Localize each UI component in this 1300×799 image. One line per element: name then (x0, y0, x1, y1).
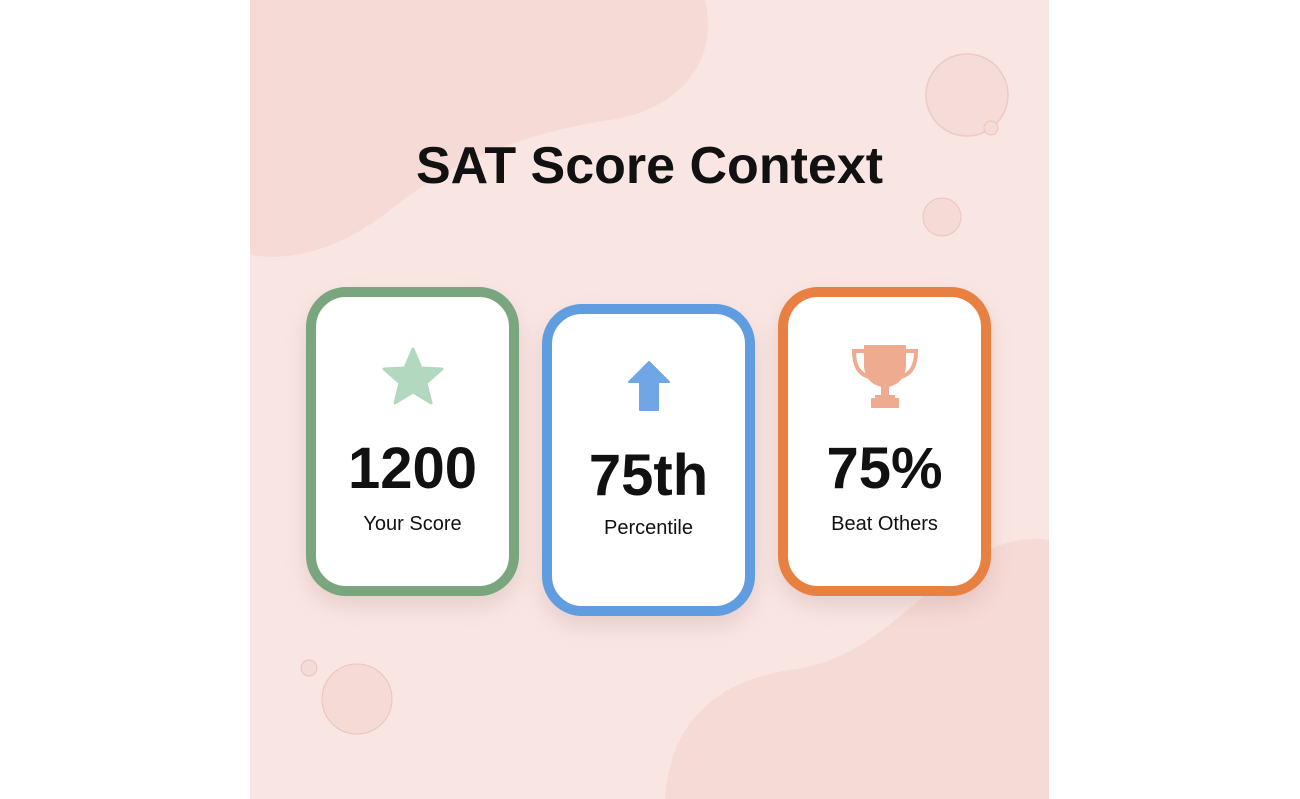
number: 75th: 75th (589, 443, 708, 508)
label: your score: Your Score (363, 513, 462, 535)
card: beat others (778, 287, 991, 596)
number: 1200: 1200 (348, 436, 477, 501)
card: your score (306, 287, 519, 596)
label: percentile: Percentile (604, 517, 693, 539)
panel: background (250, 0, 1049, 799)
icon: star (382, 348, 444, 405)
icon: up arrow (628, 361, 670, 411)
number: 75%: 75% (826, 436, 943, 501)
card: percentile (542, 304, 755, 616)
title: SAT Score Context (416, 137, 883, 195)
label: beat others: Beat Others (831, 513, 938, 535)
icon: trophy (852, 345, 918, 408)
